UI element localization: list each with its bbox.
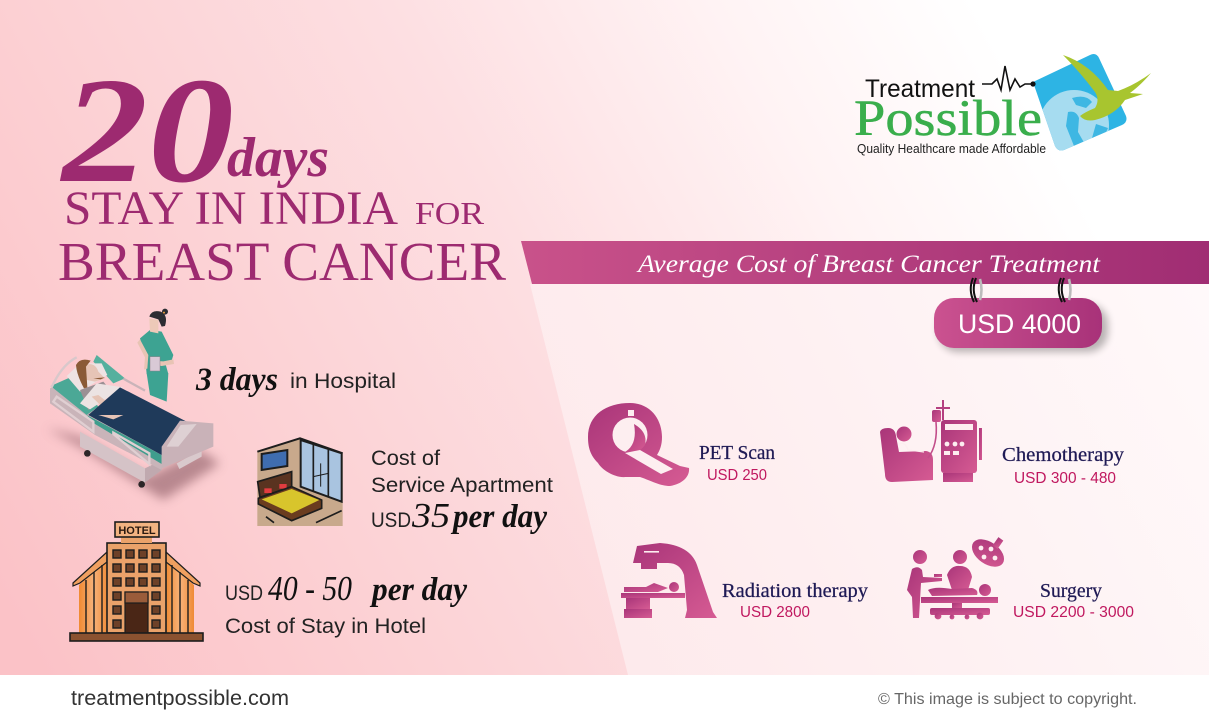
navy blanket xyxy=(88,387,190,455)
hotel wings xyxy=(79,560,108,633)
hotel windows xyxy=(113,550,160,628)
nurse xyxy=(137,309,174,402)
label: surgery: USD 2200 - 3000 xyxy=(1013,604,1134,621)
text: service apartment cost: USD xyxy=(371,509,411,532)
icon: hospital bed with nurse xyxy=(47,309,220,500)
bed base xyxy=(80,432,145,483)
patient xyxy=(928,588,977,596)
text: service apartment cost xyxy=(371,447,553,535)
footer xyxy=(0,675,1209,719)
hotel sign: HOTEL xyxy=(118,525,156,537)
text: service apartment cost: per day xyxy=(450,499,547,535)
surgical lamp xyxy=(967,534,1009,572)
bed footboard xyxy=(162,421,213,468)
logo Possible: Possible xyxy=(854,91,1042,147)
label: surgery: Surgery xyxy=(1040,580,1102,602)
total cost pill: USD 4000 xyxy=(958,309,1081,339)
stay in india for: STAY IN INDIA xyxy=(64,182,398,235)
table xyxy=(921,597,998,603)
text: 3 days in hospital: 3 days xyxy=(195,362,278,398)
label: radiation therapy xyxy=(722,580,868,621)
logo tagline: Quality Healthcare made Affordable xyxy=(857,142,1046,156)
breast cancer: BREAST CANCER xyxy=(58,231,506,292)
label: radiation therapy: Radiation therapy xyxy=(722,580,868,602)
picture xyxy=(262,450,287,470)
icon: hotel building xyxy=(70,522,203,641)
text: service apartment cost: Cost of xyxy=(371,447,440,470)
label: PET scan: USD 250 xyxy=(707,467,767,484)
assistant xyxy=(913,550,927,564)
bed xyxy=(258,487,322,521)
total cost pill xyxy=(934,278,1108,352)
label: chemotherapy: USD 300 - 480 xyxy=(1014,470,1116,487)
ribbon heading xyxy=(521,241,1209,284)
pillow xyxy=(67,363,107,392)
text: 3 days in hospital xyxy=(195,362,396,398)
label: surgery xyxy=(1013,580,1134,621)
bed wheels xyxy=(84,450,91,457)
text: hotel cost: USD xyxy=(225,582,263,605)
bed frame xyxy=(50,377,162,470)
label: radiation therapy: USD 2800 xyxy=(740,604,810,621)
icon: PET scanner xyxy=(588,403,689,486)
logo Treatment: Treatment xyxy=(865,75,975,103)
chair xyxy=(880,428,933,482)
icon: chemotherapy chair and machine xyxy=(880,400,982,482)
side rails xyxy=(53,397,149,464)
hotel tower xyxy=(107,543,166,633)
text: hotel cost: 40 - 50 xyxy=(268,569,352,608)
pill rings xyxy=(971,278,1070,302)
label: chemotherapy xyxy=(1002,444,1124,487)
text: hotel cost: Cost of Stay in Hotel xyxy=(225,615,426,638)
bed shadow xyxy=(47,428,220,500)
text: hotel cost xyxy=(225,569,467,638)
machine xyxy=(941,420,977,473)
label: chemotherapy: Chemotherapy xyxy=(1002,444,1124,466)
days script: days xyxy=(227,127,329,189)
headboard and pillows xyxy=(258,472,292,497)
ribbon heading: Average Cost of Breast Cancer Treatment xyxy=(636,251,1101,278)
surgeon xyxy=(953,550,967,564)
icon: surgery team xyxy=(907,534,1009,619)
patient xyxy=(76,360,123,421)
website address: treatmentpossible.com xyxy=(71,687,289,710)
logo blue square with globe xyxy=(1033,54,1126,160)
copyright note: © This image is subject to copyright. xyxy=(878,691,1137,708)
icon: service apartment room xyxy=(257,438,343,526)
text: service apartment cost: 35 xyxy=(411,496,450,535)
logo xyxy=(854,54,1151,160)
window xyxy=(301,440,342,502)
stay in india for: FOR xyxy=(415,195,485,231)
text: hotel cost: per day xyxy=(369,572,467,608)
hotel door xyxy=(125,592,148,633)
text: 3 days in hospital: in Hospital xyxy=(290,370,396,393)
logo bird xyxy=(1063,55,1151,120)
hotel base xyxy=(70,633,203,641)
teal mattress xyxy=(87,415,162,464)
label: PET scan xyxy=(699,442,775,484)
big number 20: 20 xyxy=(60,46,234,214)
icon: radiation machine xyxy=(621,543,717,618)
title xyxy=(58,46,506,292)
floor lines xyxy=(266,511,342,523)
logo heartbeat line xyxy=(982,66,1036,90)
label: PET scan: PET Scan xyxy=(699,442,775,464)
text: service apartment cost: Service Apartment xyxy=(371,474,553,497)
